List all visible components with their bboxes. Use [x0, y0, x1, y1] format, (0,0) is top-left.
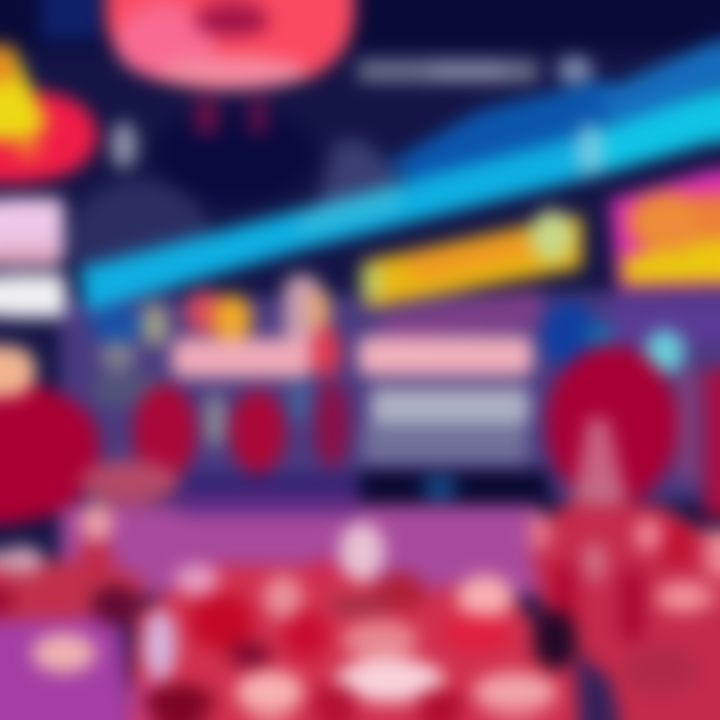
diagonal blue light streaks — [80, 38, 720, 343]
red and white checkered foreground right — [528, 478, 720, 720]
yellow sign centre — [360, 210, 582, 338]
red figures row — [0, 345, 350, 525]
red and white checkered foreground left — [0, 502, 148, 673]
red dome figure right — [546, 345, 720, 518]
red and white checkered foreground centre — [130, 522, 580, 720]
dark foreground shape — [533, 610, 620, 720]
top pink-red shape — [105, 0, 355, 90]
dark figure below pink shape — [155, 98, 315, 203]
yellow pink sign right — [610, 168, 720, 290]
grey white panel — [362, 388, 530, 500]
grey text band top right — [358, 56, 593, 84]
middle pink signs — [95, 275, 533, 405]
left white pink stack — [0, 198, 66, 318]
left yellow and red sign — [0, 45, 137, 183]
teal accent right — [542, 300, 720, 374]
